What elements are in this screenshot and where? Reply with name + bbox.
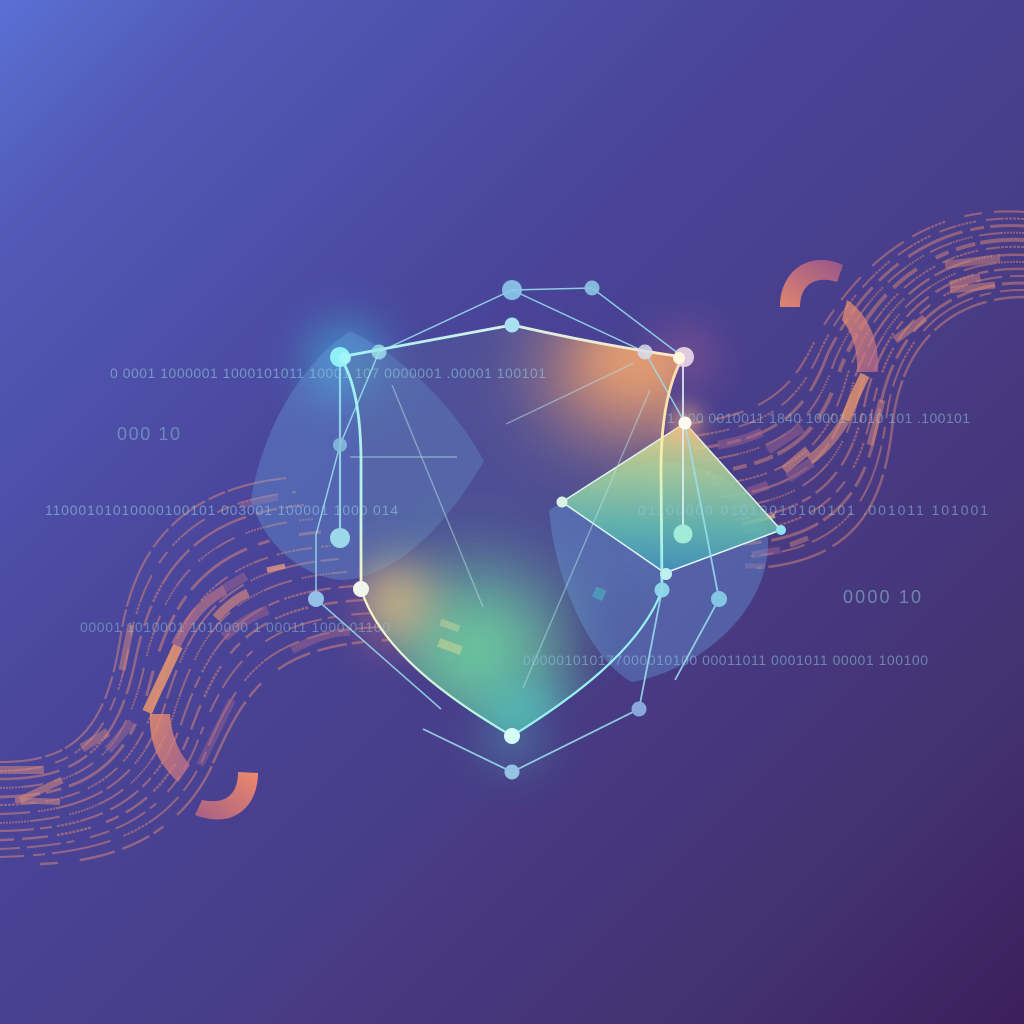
binary text: left labels: 0 0001 1000001 1000101011 10001 107 0000001 .00001 100101 <box>110 365 546 381</box>
icon: small diamond <box>592 586 607 601</box>
binary text: right labels: 0000 10 <box>843 587 921 607</box>
binary text: right labels: 01100000 01010010100101 .001011 101001 <box>638 502 988 518</box>
glow: left node and lower left <box>307 324 707 762</box>
arc: lower left outer <box>150 714 190 782</box>
data stream: upper right <box>680 211 1024 568</box>
network lines <box>316 288 719 772</box>
panel: right translucent fan <box>549 462 768 682</box>
data stream: lower left thick segments <box>0 497 350 802</box>
shield outline <box>340 325 683 736</box>
binary text: left labels: 00001 1010001 1010000 1 00011 1000 01100 <box>80 619 390 635</box>
binary text: left labels <box>45 365 546 635</box>
thin shield inner lines <box>350 363 650 688</box>
binary text: right labels <box>523 410 988 668</box>
node: top left bright <box>330 347 351 367</box>
arc: lower left inner <box>195 772 258 819</box>
panel: left translucent fan <box>251 331 484 580</box>
binary text: left labels: 000 10 <box>117 424 180 444</box>
data stream: lower left <box>0 478 390 864</box>
binary text: left labels: 11000101010000100101 003001 100001 1000 014 <box>45 502 398 518</box>
glow: kite apex <box>667 405 703 441</box>
arc: upper right outer <box>780 260 843 307</box>
data stream: upper right thick segments <box>718 258 1000 566</box>
arc: upper right inner <box>842 300 878 372</box>
binary text: right labels: 000001010177000010100 00011011 0001011 00001 100100 <box>523 652 928 668</box>
panel: diamond kite <box>562 423 781 573</box>
binary text: right labels: 1 000 0010011 1840 10001 1010 101 .100101 <box>667 410 970 426</box>
network nodes <box>308 280 786 780</box>
shield body <box>346 328 678 731</box>
